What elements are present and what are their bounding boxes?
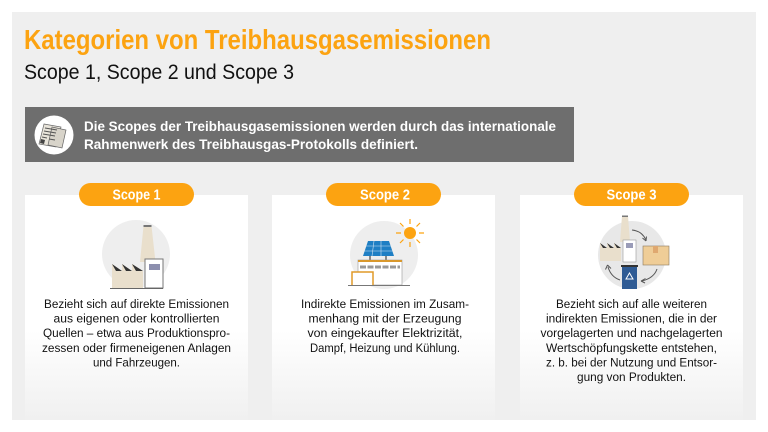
banner	[25, 107, 574, 162]
banner text: Die Scopes der Treibhausgasemissionen werden durch das internationale	[84, 118, 556, 134]
scope 3 text: Wertschöpfungskette entstehen,	[546, 341, 717, 355]
banner text: Rahmenwerk des Treibhausgas-Protokolls definiert.	[84, 136, 418, 152]
icon: documents	[34, 116, 74, 154]
scope 2 text: Dampf, Heizung und Kühlung.	[310, 341, 460, 355]
icon: solar and sun	[348, 219, 424, 289]
scope 2 text: Indirekte Emissionen im Zusam-	[301, 297, 469, 311]
scope 2 text: von eingekaufter Elektrizität,	[308, 326, 462, 340]
title: Kategorien von Treibhausgasemissionen	[24, 24, 491, 55]
panel: scope 2	[272, 183, 495, 420]
scope 1 text: aus eigenen oder kontrollierten	[54, 312, 220, 326]
subtitle: Scope 1, Scope 2 und Scope 3	[24, 60, 294, 84]
scope 3 text: gung von Produkten.	[577, 370, 686, 384]
scope 2 label	[326, 183, 441, 206]
banner text	[84, 118, 556, 152]
scope 3 label: Scope 3	[606, 188, 656, 204]
scope 3 text: indirekten Emissionen, die in der	[546, 312, 717, 326]
panel: scope 1	[25, 183, 248, 420]
scope 2 text	[301, 297, 469, 355]
scope 3 text: vorgelagerten und nachgelagerten	[540, 326, 722, 340]
scope 2 text: menhang mit der Erzeugung	[308, 312, 462, 326]
scope 1 label	[79, 183, 194, 206]
scope 1 text	[42, 297, 231, 369]
scope 3 text: Bezieht sich auf alle weiteren	[556, 297, 707, 311]
scope 1 text: Quellen – etwa aus Produktionspro-	[43, 326, 230, 340]
scope 1 text: zessen oder firmeneigenen Anlagen	[42, 341, 231, 355]
scope 1 text: und Fahrzeugen.	[93, 355, 180, 369]
scope 3 text	[540, 297, 722, 384]
scope 2 label: Scope 2	[360, 188, 410, 204]
icon: value chain cycle	[598, 216, 669, 289]
scope 3 text: z. b. bei der Nutzung und Entsor-	[546, 355, 717, 369]
scope 1 text: Bezieht sich auf direkte Emissionen	[44, 297, 229, 311]
icon: factory	[102, 220, 170, 288]
scope 3 label	[574, 183, 689, 206]
panel: scope 3	[520, 183, 743, 420]
scope 1 label: Scope 1	[112, 188, 160, 204]
